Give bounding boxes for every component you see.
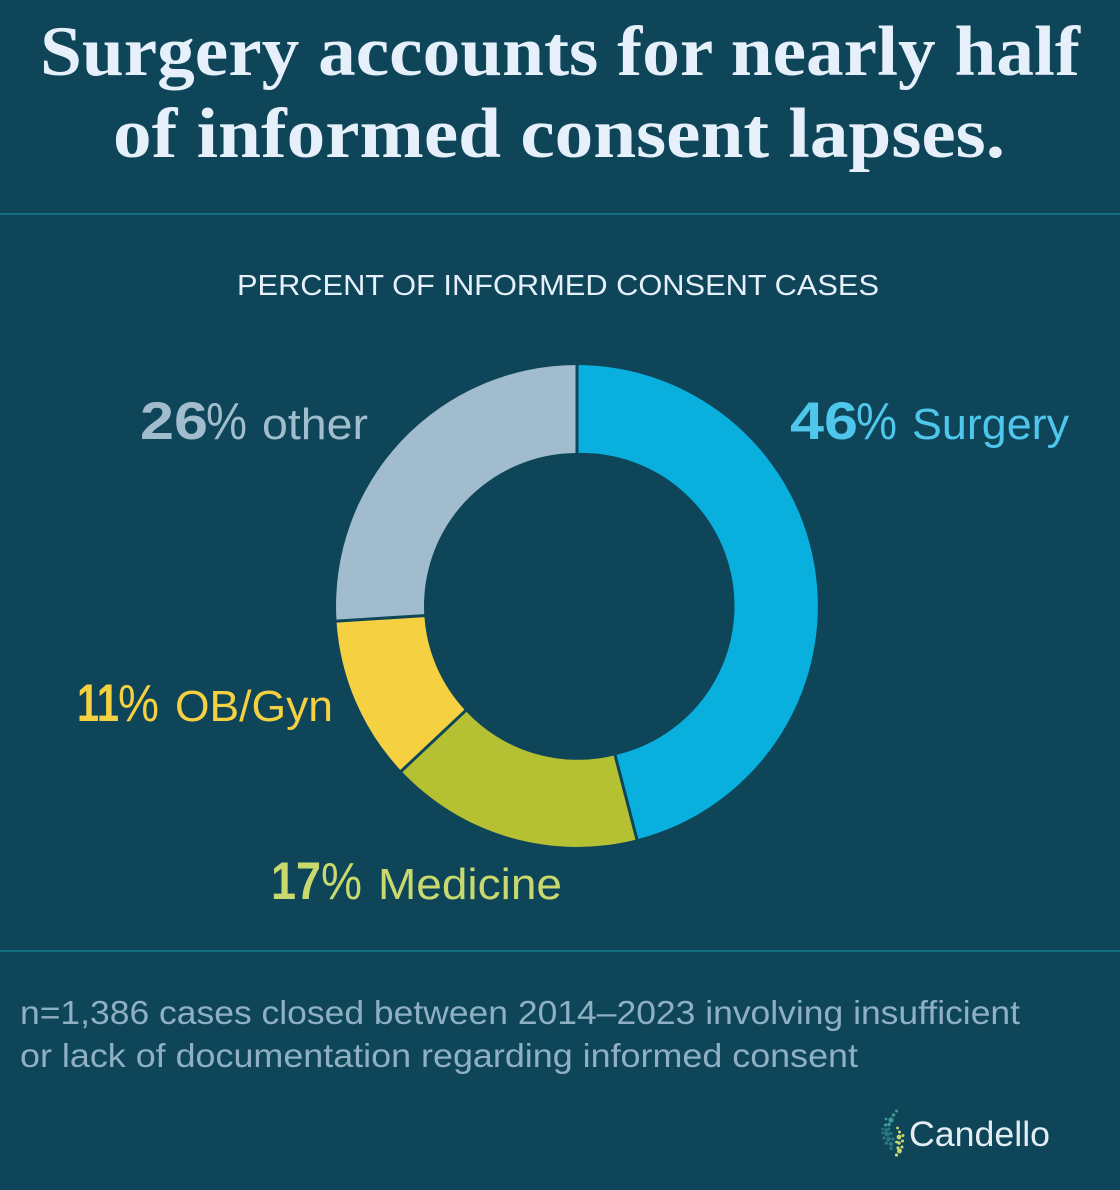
title: of informed consent lapses.	[113, 95, 1005, 173]
label: 46% Surgery	[790, 392, 1069, 451]
label: 11% OB/Gyn: %	[118, 675, 159, 733]
label: 46% Surgery: %	[856, 393, 897, 451]
title: Surgery accounts for nearly half	[40, 13, 1081, 91]
label: 17% Medicine: 17	[271, 852, 321, 911]
footnote	[20, 994, 1020, 1074]
label: 46% Surgery: Surgery	[912, 400, 1069, 449]
label: 17% Medicine: %	[321, 853, 362, 911]
label: 26% other: 26	[140, 392, 208, 451]
segment: other 26%	[336, 365, 577, 621]
segment: medicine 17%	[401, 711, 637, 847]
footnote: or lack of documentation regarding informed consent	[20, 1037, 858, 1074]
label: 26% other: %	[206, 393, 247, 451]
footnote: n=1,386 cases closed between 2014–2023 involving insufficient	[20, 994, 1020, 1031]
title	[40, 13, 1081, 173]
label: 11% OB/Gyn	[77, 674, 333, 733]
label: 17% Medicine	[271, 852, 562, 911]
label: 11% OB/Gyn: 11	[77, 674, 119, 733]
donut chart	[334, 363, 818, 847]
label: 26% other	[140, 392, 368, 451]
label: 11% OB/Gyn: OB/Gyn	[175, 682, 333, 731]
segment: OB/Gyn 11%	[336, 616, 466, 771]
wordmark: Candello	[909, 1115, 1050, 1154]
label: 46% Surgery: 46	[790, 392, 858, 451]
icon: dotted flame	[881, 1110, 904, 1157]
logo: Candello	[881, 1110, 1050, 1157]
label: 17% Medicine: Medicine	[378, 860, 562, 909]
chart heading: PERCENT OF INFORMED CONSENT CASES	[237, 270, 879, 302]
label: 26% other: other	[262, 400, 368, 449]
segment: surgery 46%	[577, 365, 818, 839]
